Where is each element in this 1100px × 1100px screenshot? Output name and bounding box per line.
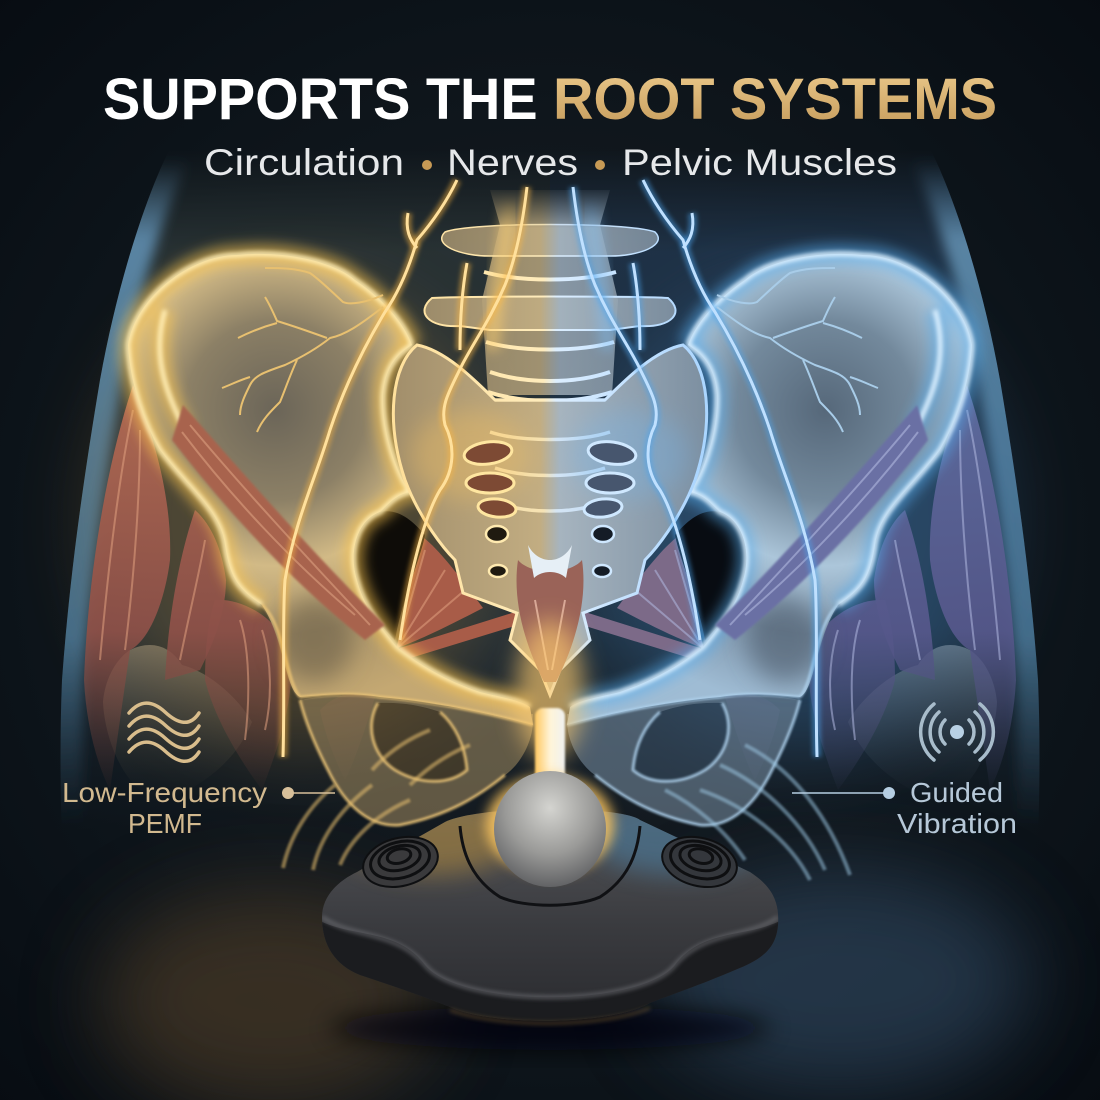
floor warm glow xyxy=(100,890,440,1100)
bottom edge glow xyxy=(450,1008,650,1023)
left femur head xyxy=(103,645,252,800)
muscles right xyxy=(582,385,1016,790)
energy beam xyxy=(516,620,584,784)
body silhouette right xyxy=(550,130,1040,840)
label: low-frequency PEMF: Low-Frequency xyxy=(62,777,267,808)
right femur head xyxy=(848,645,997,800)
icon: waves xyxy=(129,703,199,761)
floor cool glow xyxy=(650,870,1030,1090)
icon: vibration xyxy=(921,704,993,760)
label: guided vibration xyxy=(897,777,1017,839)
dome recess xyxy=(460,826,640,905)
spine xyxy=(425,190,675,401)
right hip bones xyxy=(567,254,972,825)
label: low-frequency PEMF: PEMF xyxy=(128,808,202,839)
dome glow xyxy=(486,775,614,875)
body silhouette left xyxy=(60,130,550,840)
left knob xyxy=(358,829,443,894)
right nerves xyxy=(573,180,878,757)
subtitle xyxy=(204,142,897,183)
right vibration arcs xyxy=(665,745,850,880)
right knob xyxy=(657,829,742,894)
ambient blue glow xyxy=(600,290,1000,750)
device shading xyxy=(322,812,778,1020)
left hip bones xyxy=(128,254,533,825)
label: low-frequency PEMF xyxy=(62,777,267,839)
connector: vibration xyxy=(792,787,895,799)
device xyxy=(310,771,790,1050)
device base xyxy=(322,809,778,1021)
label: guided vibration: Vibration xyxy=(897,808,1017,839)
ambient gold glow xyxy=(100,290,500,750)
left vibration arcs xyxy=(283,730,470,870)
subtitle: Circulation xyxy=(204,142,404,183)
device shadow xyxy=(330,1006,770,1050)
central red muscle xyxy=(517,545,583,682)
muscles left xyxy=(84,385,518,790)
connector: PEMF xyxy=(282,787,335,799)
subtitle: Pelvic Muscles xyxy=(622,142,897,183)
label: guided vibration: Guided xyxy=(910,777,1003,808)
dome xyxy=(494,771,606,887)
left nerves xyxy=(222,180,527,757)
left diagonal muscle band xyxy=(172,405,385,640)
right diagonal muscle band xyxy=(715,405,928,640)
subtitle: Nerves xyxy=(447,142,578,183)
sacrum xyxy=(393,345,707,695)
title: SUPPORTS THE ROOT SYSTEMS xyxy=(103,67,997,132)
